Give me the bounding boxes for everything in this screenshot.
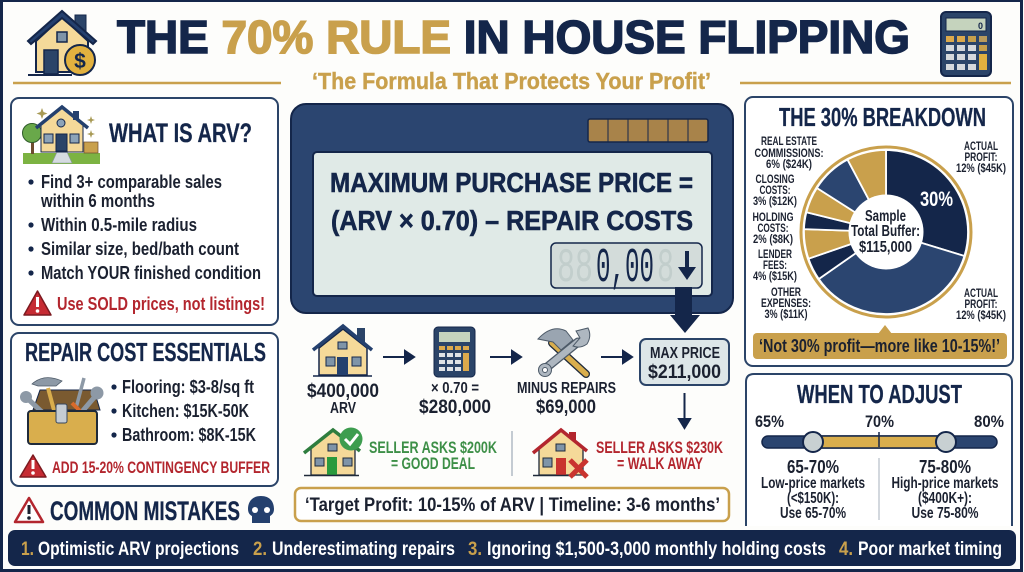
bottom bar: common mistakes list: 3. bbox=[468, 538, 482, 560]
panel: repair cost essentials bbox=[11, 333, 278, 486]
outcome: walk away bbox=[533, 430, 723, 477]
donut labels right bbox=[956, 139, 1006, 322]
high-price markets text bbox=[892, 456, 998, 522]
digital readout bbox=[551, 242, 702, 296]
ARV bullet list bbox=[28, 172, 261, 283]
low-price markets text: Low-price markets bbox=[761, 475, 865, 492]
max price box: MAX PRICE bbox=[650, 345, 720, 362]
repair bullet list: Flooring: $3-8/sq ft bbox=[122, 377, 254, 397]
low-price markets text: Use 65-70% bbox=[780, 505, 846, 522]
arrow: formula to max price bbox=[670, 287, 700, 333]
bottom bar: common mistakes list: 2. bbox=[253, 538, 267, 560]
bottom bar: common mistakes list: Optimistic ARV projections bbox=[38, 538, 239, 560]
formula text: MAXIMUM PURCHASE PRICE = bbox=[330, 167, 693, 198]
donut chart: Total Buffer: bbox=[851, 223, 920, 240]
donut labels right: PROFIT: bbox=[964, 297, 998, 311]
title: THE 70% RULE IN HOUSE FLIPPING bbox=[117, 11, 910, 63]
high-price markets text: Use 75-80% bbox=[912, 505, 979, 522]
repair bullet list bbox=[111, 377, 256, 445]
donut labels left: CLOSING bbox=[756, 172, 794, 186]
flow step: repairs: MINUS REPAIRS bbox=[517, 380, 616, 397]
panel: 30% breakdown bbox=[745, 97, 1013, 366]
panel: when to adjust bbox=[746, 374, 1012, 526]
arrow bbox=[601, 351, 632, 363]
ARV bullet list: within 6 months bbox=[40, 191, 155, 211]
donut labels left: 4% ($15K) bbox=[753, 269, 797, 283]
arrow: max price to outcomes bbox=[679, 393, 690, 428]
bottom bar: common mistakes list bbox=[8, 530, 1016, 566]
slider: 80% bbox=[974, 412, 1004, 431]
icon: calculator bbox=[941, 12, 991, 76]
donut chart: 30% bbox=[920, 188, 953, 211]
callout: not 30% profit bbox=[753, 325, 1007, 359]
repair bullet list: Kitchen: $15K-50K bbox=[122, 401, 249, 421]
donut labels left: 6% ($24K) bbox=[766, 157, 812, 171]
bottom bar: common mistakes list: Underestimating repairs bbox=[272, 538, 455, 560]
flow step: multiply bbox=[419, 327, 491, 418]
flow step: multiply: × 0.70 = bbox=[431, 380, 479, 397]
donut labels right: PROFIT: bbox=[964, 150, 998, 164]
donut labels left: EXPENSES: bbox=[761, 296, 811, 310]
heading: when to adjust: WHEN TO ADJUST bbox=[797, 379, 962, 409]
donut labels left bbox=[752, 134, 824, 321]
formula text: (ARV × 0.70) – REPAIR COSTS bbox=[331, 205, 693, 236]
bottom bar: common mistakes list: Ignoring $1,500-3,000 monthly holding costs bbox=[487, 538, 826, 560]
low-price markets text: 65-70% bbox=[787, 456, 839, 477]
slider bbox=[755, 412, 1004, 452]
arrow bbox=[383, 351, 414, 363]
bottom bar: common mistakes list: 4. bbox=[839, 538, 853, 560]
bottom bar: common mistakes list: 1. bbox=[21, 538, 34, 560]
donut labels left: OTHER bbox=[771, 285, 801, 299]
ARV bullet list: Find 3+ comparable sales bbox=[41, 172, 222, 192]
icon: house with yard bbox=[22, 107, 100, 164]
donut labels right: 12% ($45K) bbox=[956, 161, 1006, 175]
warning: sold prices: Use SOLD prices, not listings! bbox=[57, 294, 265, 314]
formula text bbox=[330, 167, 693, 236]
donut labels left: LENDER bbox=[758, 247, 792, 261]
max price box: $211,000 bbox=[648, 361, 721, 383]
donut labels right: 12% ($45K) bbox=[956, 308, 1006, 322]
outcome: good deal: = GOOD DEAL bbox=[391, 455, 475, 473]
low-price markets text bbox=[761, 456, 865, 522]
donut labels left: COMMISSIONS: bbox=[754, 146, 824, 160]
icon: house with dollar coin bbox=[28, 11, 96, 75]
warning: contingency buffer: ADD 15-20% CONTINGENCY BUFFER bbox=[52, 459, 270, 477]
ARV bullet list: Match YOUR finished condition bbox=[41, 263, 261, 283]
digital readout: 8 bbox=[657, 242, 674, 296]
icon: calculator: 0 bbox=[978, 21, 983, 31]
ARV bullet list: Within 0.5-mile radius bbox=[41, 215, 197, 235]
slider: 70% bbox=[865, 412, 894, 431]
flow step: multiply: $280,000 bbox=[419, 396, 491, 418]
donut chart: $115,000 bbox=[859, 239, 912, 256]
digital readout: 88 bbox=[557, 242, 593, 296]
warning: sold prices bbox=[24, 291, 265, 315]
donut labels right: ACTUAL bbox=[964, 286, 998, 300]
flow step: repairs: $69,000 bbox=[536, 396, 596, 418]
donut labels left: FEES: bbox=[763, 258, 787, 272]
flow step: ARV: ARV bbox=[330, 400, 356, 417]
donut labels left: REAL ESTATE bbox=[761, 134, 817, 148]
arrow bbox=[490, 351, 521, 363]
warning: contingency buffer bbox=[20, 455, 270, 477]
heading: what is ARV: WHAT IS ARV? bbox=[109, 118, 252, 148]
calculator solar strip bbox=[588, 119, 708, 142]
outcome: walk away: SELLER ASKS $230K bbox=[596, 439, 723, 457]
heading: repair cost essentials: REPAIR COST ESSENTIALS bbox=[25, 337, 266, 367]
outcome: good deal bbox=[304, 428, 497, 476]
target profit box bbox=[295, 488, 729, 521]
outcome: walk away: = WALK AWAY bbox=[617, 455, 703, 473]
donut labels left: 3% ($11K) bbox=[764, 307, 808, 321]
panel: calculator formula bbox=[291, 104, 733, 313]
donut labels left: 3% ($12K) bbox=[753, 194, 797, 208]
target profit box: ‘Target Profit: 10-15% of ARV | Timeline: 3-6 months’ bbox=[305, 494, 720, 516]
flow step: repairs bbox=[517, 328, 616, 418]
donut labels left: HOLDING bbox=[752, 210, 794, 224]
icon: house with dollar coin: $ bbox=[74, 50, 86, 73]
donut labels left: COSTS: bbox=[760, 183, 790, 197]
donut labels left: 2% ($8K) bbox=[753, 232, 793, 246]
donut labels right: ACTUAL bbox=[964, 139, 998, 153]
donut chart bbox=[801, 147, 971, 317]
ARV bullet list: Similar size, bed/bath count bbox=[41, 239, 239, 259]
calculator screen bbox=[313, 152, 712, 296]
high-price markets text: 75-80% bbox=[919, 456, 971, 477]
max price box bbox=[640, 339, 729, 385]
subtitle: ‘The Formula That Protects Your Profit’ bbox=[312, 68, 711, 94]
high-price markets text: ($400K+): bbox=[918, 490, 972, 507]
donut chart: Sample bbox=[865, 208, 906, 225]
outcome: good deal: SELLER ASKS $200K bbox=[369, 439, 497, 457]
flow step: ARV bbox=[307, 326, 379, 417]
heading: common mistakes: COMMON MISTAKES bbox=[50, 496, 240, 526]
flow step: ARV: $400,000 bbox=[307, 380, 379, 402]
panel: what is ARV bbox=[11, 98, 278, 325]
digital readout: 0,00 bbox=[596, 242, 654, 296]
low-price markets text: (<$150K): bbox=[787, 490, 839, 507]
repair bullet list: Bathroom: $8K-15K bbox=[122, 425, 256, 445]
icon: toolbox bbox=[20, 378, 104, 444]
slider: 65% bbox=[755, 412, 784, 431]
donut labels left: COSTS: bbox=[758, 221, 788, 235]
